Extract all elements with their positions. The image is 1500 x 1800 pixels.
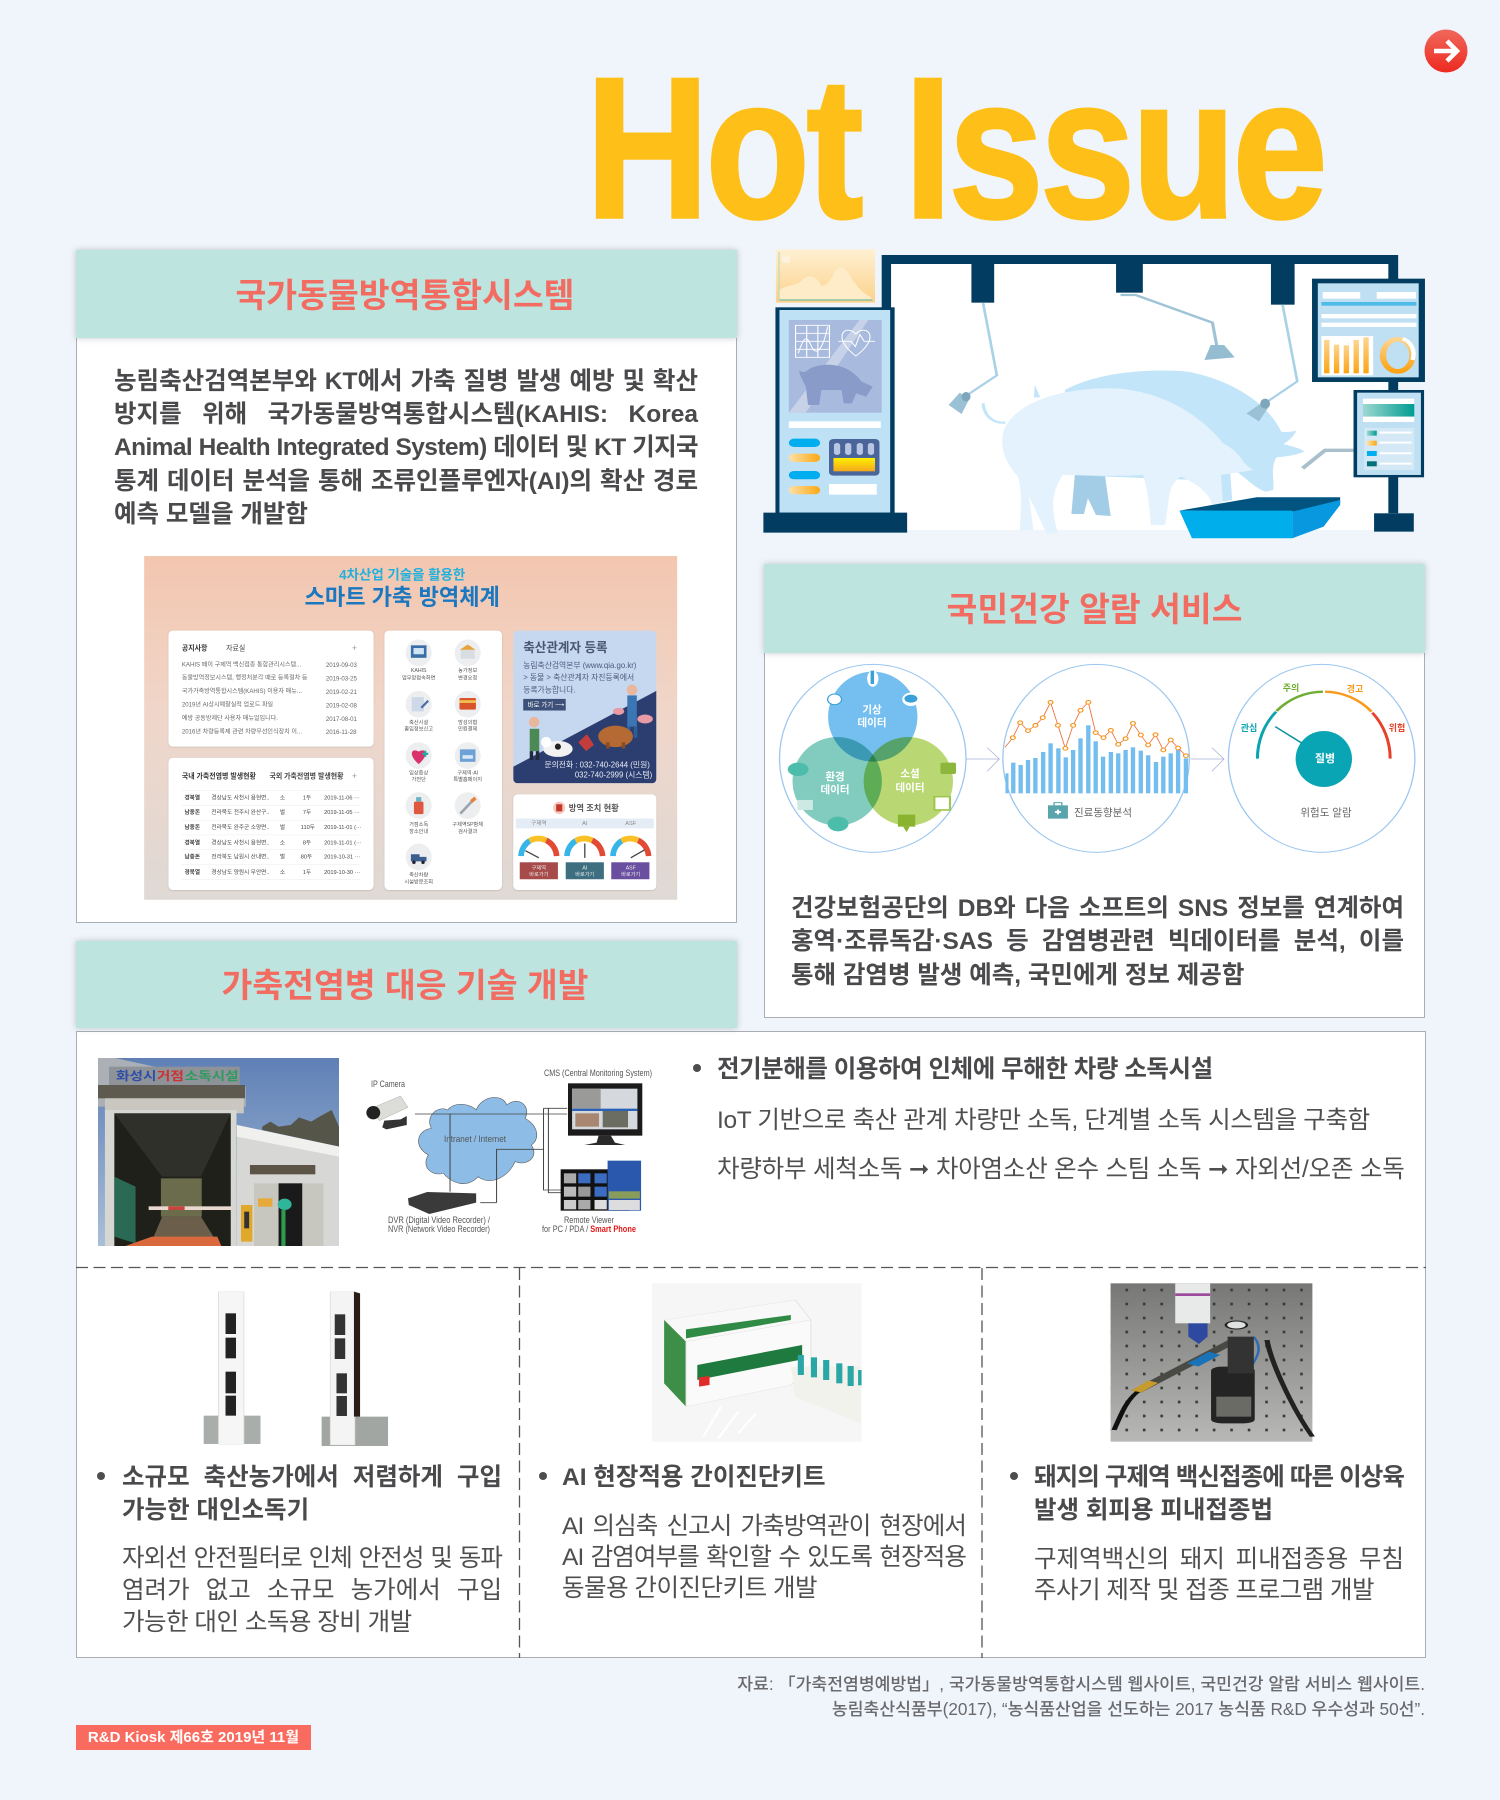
- heading: disease response technology: [76, 941, 737, 1028]
- venn and gauge labels: 데이터: [821, 783, 849, 796]
- card: outbreak status: 경상남도 양원시 무안면..: [211, 868, 270, 876]
- card: notices: KAHIS 페이 구제역 백신접종 통합관리시스템...: [182, 660, 301, 668]
- card: service icons: 장소안내: [409, 827, 428, 835]
- venn and gauge labels: 경고: [1347, 683, 1363, 694]
- text block: low-cost disinfector: 소규모 축산농가에서 저렴하게 구입: [122, 1464, 502, 1490]
- heading: health alert service: 국민건강 알람 서비스: [946, 592, 1242, 629]
- card: outbreak status: 2019-10-30 ···: [324, 870, 360, 876]
- text block: AI rapid test kit: 동물용 간이진단키트 개발: [562, 1574, 817, 1602]
- walk-through disinfectors: [204, 1292, 388, 1446]
- card: service icons: 민원결제: [458, 725, 477, 733]
- source note: 농림축산식품부(2017), “농식품산업을 선도하는 2017 농식품 R&D 우수성과 50선”.: [832, 1699, 1425, 1719]
- card: outbreak status: 1두: [303, 869, 311, 876]
- card: service icons: 변경요청: [458, 673, 477, 681]
- photo: vehicle disinfection facility: 화성시: [116, 1069, 157, 1083]
- venn and gauge labels: 데이터: [896, 781, 924, 794]
- card: service icons: 가전단: [412, 775, 426, 783]
- text block: KAHIS description: 농림축산검역본부와 KT에서 가축 질병 발생 예방 및 확산: [114, 368, 698, 394]
- card: outbreak status: 7두: [303, 809, 311, 816]
- venn and gauge labels: 주의: [1283, 683, 1299, 693]
- card: quarantine measures gauges: ASF: [626, 865, 636, 871]
- card: notices: 2016년 차량등록제 관련 차량무선인식장치 이...: [182, 727, 302, 735]
- card: outbreak status: 국외 가축전염병 발생현황: [270, 771, 344, 780]
- card: service icons: 거점소독: [409, 820, 428, 828]
- pig front: [983, 388, 1254, 534]
- card: livestock worker registration: 문의전화 : 032-740-2644 (민원): [544, 760, 650, 770]
- card: outbreak status: 경북열: [184, 838, 200, 846]
- monitor right bottom: [1354, 390, 1424, 532]
- diagram labels: Intranet / Internet: [444, 1134, 506, 1145]
- photo: vehicle disinfection facility: 거점: [157, 1069, 184, 1083]
- chart: smart livestock quarantine dashboard screenshot: 4차산업 기술을 활용한: [339, 568, 466, 583]
- heading: national animal disease system: 국가동물방역통합시스템: [235, 278, 575, 315]
- card: notices: 동물방역정보시스템, 행정처분각 때로 등록절차 등: [182, 674, 308, 682]
- card: service icons: 축산시설: [409, 718, 428, 726]
- card: service icons: KAHIS: [411, 668, 427, 674]
- text block: vehicle disinfection: [693, 1056, 1405, 1182]
- card: quarantine measures gauges: 구제역: [531, 819, 547, 827]
- monitor right top: [1312, 279, 1425, 382]
- card: livestock worker registration: > 동물 > 축산관계자 자진등록에서: [523, 672, 634, 682]
- card: livestock worker registration: 등록가능합니다.: [523, 685, 576, 695]
- text block: intradermal injection for pigs: 발생 회피용 피내접종법: [1034, 1496, 1273, 1524]
- card: quarantine measures gauges: 바로가기: [529, 870, 549, 878]
- bullet: [1010, 1472, 1018, 1480]
- text block: health alert description: 홍역·조류독감·SAS 등 감염병관련 빅데이터를 분석, 이를: [791, 928, 1404, 954]
- arrow badge: [1424, 30, 1468, 72]
- heading: disease response technology: 가축전염병 대응 기술 개발: [222, 968, 588, 1005]
- text block: low-cost disinfector: 가능한 대인소독기: [122, 1496, 309, 1524]
- chart: three-step risk process diagram: [778, 664, 1416, 853]
- card: service icons: 출입정보신고: [404, 725, 433, 733]
- remote viewer: [561, 1161, 641, 1211]
- venn and gauge labels: 질병: [1315, 751, 1335, 765]
- venn and gauge labels: 위험도 알람: [1300, 806, 1352, 819]
- diagram labels: IP Camera: [371, 1079, 406, 1090]
- card: notices: 2019-03-25: [326, 676, 357, 683]
- venn and gauge labels: 환경: [825, 770, 845, 783]
- card: quarantine measures gauges: [513, 794, 656, 890]
- card: notices: [168, 631, 374, 747]
- venn and gauge labels: [821, 683, 1405, 819]
- venn and gauge labels: 위험: [1389, 722, 1405, 733]
- diagram labels: CMS (Central Monitoring System): [544, 1068, 652, 1079]
- card: service icons: 특별홈페이지: [453, 775, 482, 783]
- card: outbreak status: 남종돈: [184, 823, 201, 831]
- card: notices: 예방 공동방제단 사용자 매뉴얼입니다.: [182, 714, 278, 722]
- text block: KAHIS description: Animal Health Integrated System) 데이터 및 KT 기지국: [114, 434, 698, 460]
- card: notices: 2019-02-21: [326, 689, 357, 696]
- text block: AI rapid test kit: [539, 1464, 966, 1602]
- bullet: [97, 1472, 105, 1480]
- card: service icons: 임상증상: [409, 768, 428, 776]
- card: service icons: 시설방문조회: [404, 877, 433, 885]
- issue badge: R&D Kiosk 제66호 2019년 11월: [88, 1729, 299, 1746]
- card: livestock worker registration: 농림축산검역본부 (www.qia.go.kr): [523, 660, 637, 670]
- card: outbreak status: 전라북도 남원시 산내면..: [211, 853, 270, 861]
- issue badge: [76, 1725, 311, 1750]
- card: outbreak status: 2019-11-05 ···: [324, 810, 360, 816]
- card: service icons: 업무망접속화면: [402, 673, 436, 681]
- card: outbreak status: 2019-11-01 (···: [324, 840, 362, 846]
- card: quarantine measures gauges: 바로가기: [621, 870, 640, 878]
- card: outbreak status: 80두: [301, 854, 312, 861]
- card: outbreak status: 벌: [280, 808, 285, 816]
- camera: [366, 1096, 408, 1129]
- card: outbreak status: 남종돈: [184, 853, 201, 861]
- card: service icons: [384, 631, 502, 890]
- card: outbreak status: 경상남도 사천시 용현면..: [211, 838, 270, 846]
- frame: [882, 255, 1398, 513]
- bar and line chart: [1003, 664, 1189, 852]
- diagram labels: [371, 1068, 652, 1235]
- text block: intradermal injection for pigs: 구제역백신의 돼지 피내접종용 무침: [1034, 1546, 1404, 1572]
- card: outbreak status: 110두: [301, 824, 315, 831]
- card: outbreak status: +: [352, 771, 357, 781]
- text block: intradermal injection for pigs: 돼지의 구제역 백신접종에 따른 이상육: [1034, 1464, 1404, 1490]
- text block: health alert description: 건강보험공단의 DB와 다음 소프트의 SNS 정보를 연계하여: [791, 894, 1404, 922]
- recorder: [408, 1192, 476, 1214]
- ceiling mounts and arms: [949, 264, 1295, 414]
- card: outbreak status: 경상남도 사천시 용현면..: [211, 793, 270, 801]
- text block: low-cost disinfector: 염려가 없고 소규모 농가에서 구입: [122, 1576, 502, 1604]
- risk gauge: [1228, 664, 1415, 852]
- card: notices: 공지사항: [182, 644, 208, 653]
- venn and gauge labels: 소셜: [900, 768, 920, 780]
- diagram labels: DVR (Digital Video Recorder) /: [388, 1215, 490, 1226]
- bullet: [693, 1064, 701, 1072]
- network lines: [415, 1108, 567, 1203]
- diagram labels: NVR (Network Video Recorder): [388, 1224, 490, 1235]
- photo: vehicle disinfection facility: [98, 1058, 339, 1246]
- text block: KAHIS description: 방지를 위해 국가동물방역통합시스템(KAHIS: Korea: [114, 400, 698, 428]
- text block: low-cost disinfector: 가능한 대인 소독용 장비 개발: [122, 1608, 412, 1636]
- card: service icons: 검사결과: [458, 827, 477, 835]
- chart: smart livestock quarantine dashboard screenshot: 스마트 가축 방역체계: [305, 585, 500, 610]
- card: notices: 2019-09-03: [326, 662, 357, 669]
- card: notices: 2019년 AI상시예찰실적 업로드 파일: [182, 700, 273, 709]
- card: livestock worker registration: 032-740-2999 (시스템): [575, 769, 653, 779]
- card: service icons: 구제역SP항체: [452, 820, 483, 828]
- card: outbreak status: 남종돈: [184, 808, 201, 816]
- venn and gauge labels: 데이터: [858, 716, 886, 729]
- text block: AI rapid test kit: AI 의심축 신고시 가축방역관이 현장에서: [562, 1512, 966, 1540]
- kiosk left: [763, 307, 907, 533]
- arm from small monitor: [1303, 450, 1354, 468]
- card: livestock worker registration: 바로 가기 ⟶: [528, 700, 565, 709]
- bullet: [539, 1472, 547, 1480]
- card: notices: 국가가축방역통합시스템(KAHIS) 이용자 매뉴...: [182, 687, 302, 695]
- pig back: [1034, 371, 1304, 516]
- text block: vehicle disinfection: 전기분해를 이용하여 인체에 무해한 차량 소독시설: [717, 1056, 1213, 1082]
- card: outbreak status: 국내 가축전염병 발생현황: [182, 771, 256, 780]
- text block: health alert description: 통해 감염병 발생 예측, 국민에게 정보 제공함: [791, 962, 1244, 988]
- yellow chart card: [776, 249, 875, 303]
- cloud: [419, 1097, 537, 1184]
- card: outbreak status: 소: [280, 839, 285, 846]
- card: notices: 2017-08-01: [326, 716, 357, 723]
- monitor: [568, 1083, 642, 1145]
- card: outbreak status: 벌: [280, 853, 285, 861]
- rapid test kit: [652, 1283, 862, 1442]
- card: outbreak status: [168, 758, 374, 890]
- card: outbreak status: 전라북도 완주군 소양면..: [211, 823, 270, 831]
- card: notices: 2019-02-08: [326, 702, 357, 709]
- card: outbreak status: 벌: [280, 823, 285, 831]
- card: outbreak status: 2019-10-31 ···: [324, 855, 360, 861]
- text block: health alert description: [791, 894, 1404, 988]
- card: service icons: 농가정보: [458, 666, 477, 674]
- card: outbreak status: 소: [280, 869, 285, 876]
- source note: 자료: 「가축전염병예방법」, 국가동물방역통합시스템 웹사이트, 국민건강 알람 서비스 웹사이트.: [737, 1674, 1425, 1694]
- card: livestock worker registration: [513, 631, 656, 783]
- feed trough: [1179, 497, 1340, 538]
- card: outbreak status: 1두: [303, 794, 311, 801]
- source note: [737, 1674, 1425, 1719]
- card: outbreak status: 소: [280, 794, 285, 801]
- venn and gauge labels: 기상: [862, 703, 882, 716]
- card: notices: 자료실: [226, 644, 245, 653]
- text block: KAHIS description: 예측 모델을 개발함: [114, 500, 308, 528]
- text block: AI rapid test kit: AI 감염여부를 확인할 수 있도록 현장적용: [562, 1544, 966, 1570]
- card: quarantine measures gauges: AI: [582, 821, 588, 827]
- card: outbreak status: 경북열: [184, 868, 200, 876]
- venn and gauge labels: 진료동향분석: [1074, 807, 1132, 819]
- card: notices: 2016-11-28: [326, 729, 357, 736]
- card: quarantine measures gauges: 바로가기: [575, 870, 594, 878]
- card: outbreak status: 8두: [303, 839, 311, 846]
- card: service icons: 구제역·AI: [457, 768, 478, 776]
- text block: intradermal injection for pigs: 주사기 제작 및 접종 프로그램 개발: [1034, 1576, 1374, 1604]
- card: service icons: 방성의협: [458, 718, 477, 726]
- diagram labels: for PC / PDA / Smart Phone: [542, 1224, 636, 1235]
- text block: vehicle disinfection: 차량하부 세척소독 ➞ 차아염소산 온수 스팀 소독 ➞ 자외선/오존 소독: [717, 1156, 1405, 1182]
- text block: low-cost disinfector: 자외선 안전필터로 인체 안전성 및 동파: [122, 1544, 502, 1572]
- text block: AI rapid test kit: AI 현장적용 간이진단키트: [562, 1464, 826, 1490]
- diagram labels: Remote Viewer: [564, 1215, 614, 1226]
- card: outbreak status: 경북열: [184, 793, 200, 801]
- card: notices: +: [352, 643, 357, 653]
- card: service icons: 축산차량: [409, 870, 428, 879]
- card: quarantine measures gauges: 방역 조치 현황: [569, 803, 619, 813]
- text block: intradermal injection for pigs: [1010, 1464, 1404, 1604]
- heading: national animal disease system: [76, 250, 737, 338]
- panel: health alert: [764, 652, 1425, 1018]
- text block: low-cost disinfector: [97, 1464, 502, 1636]
- text block: KAHIS description: 통계 데이터 분석을 통해 조류인플루엔자(AI)의 확산 경로: [114, 468, 698, 494]
- injector photo: [1111, 1283, 1312, 1442]
- card: quarantine measures gauges: ASF: [625, 821, 637, 827]
- venn circles: [780, 664, 966, 852]
- photo: vehicle disinfection facility: 소독시설: [185, 1069, 239, 1083]
- card: outbreak status: 2019-11-01 (···: [324, 825, 362, 831]
- card: livestock worker registration: 축산관계자 등록: [523, 640, 608, 655]
- card: quarantine measures gauges: 구제역: [532, 863, 546, 871]
- process arrows: [966, 748, 1224, 771]
- venn and gauge labels: 관심: [1241, 722, 1257, 733]
- chart: smart livestock quarantine dashboard screenshot: [144, 556, 678, 900]
- card: outbreak status: 2019-11-06 ···: [324, 795, 360, 801]
- dividers: [76, 1266, 1426, 1658]
- card: quarantine measures gauges: AI: [582, 865, 587, 871]
- panel: national animal disease system: [76, 337, 737, 923]
- heading: health alert service: [764, 564, 1425, 653]
- card: outbreak status: 전라북도 전주시 완산구..: [211, 808, 270, 816]
- text block: KAHIS description: [114, 368, 698, 528]
- panel: disease response technologies: [76, 1031, 1426, 1658]
- text block: vehicle disinfection: IoT 기반으로 축산 관계 차량만 소독, 단계별 소독 시스템을 구축함: [717, 1106, 1370, 1134]
